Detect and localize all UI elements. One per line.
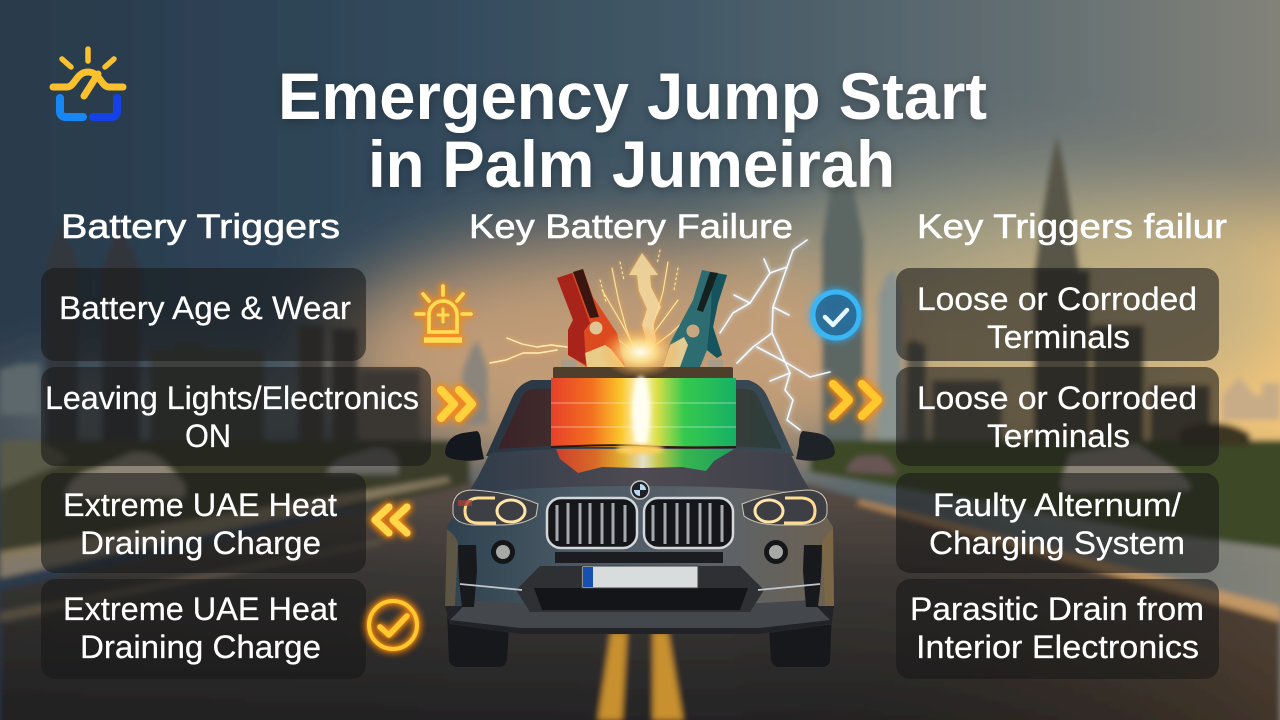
headlight right <box>742 490 827 525</box>
roof and windshield <box>486 380 794 456</box>
panel: Loose or Corroded Terminals 1 <box>896 268 1219 361</box>
battery <box>551 360 736 454</box>
grille left <box>547 498 637 548</box>
icon: double chevron right (right column) <box>833 384 878 416</box>
title: Emergency Jump Start <box>278 59 987 133</box>
panel: Faulty Alternum: Charging System <box>929 525 1185 561</box>
icon: double chevron right (left column) <box>441 390 472 418</box>
icon: double chevron left <box>375 507 407 533</box>
bumper intake <box>555 552 723 563</box>
mirror left <box>445 431 484 461</box>
lower bumper <box>516 566 764 612</box>
side vents <box>458 545 822 607</box>
logo icon: sun and battery <box>53 49 123 117</box>
panel: Extreme UAE Heat 2: Draining Charge <box>80 629 321 665</box>
panel: Faulty Alternum: Faulty Alternum/ <box>933 487 1181 523</box>
headlight left <box>453 490 538 525</box>
red clamp <box>557 269 625 367</box>
mirror right <box>796 431 835 461</box>
panel: Faulty Alternum <box>896 473 1219 573</box>
panel: Extreme UAE Heat 1: Draining Charge <box>80 525 321 561</box>
spark arrow <box>629 253 661 355</box>
panel: Loose or Corroded Terminals 1: Loose or Corroded <box>917 281 1197 317</box>
BMW badge <box>631 481 649 499</box>
hood reflection <box>556 449 734 473</box>
panel: Loose or Corroded Terminals 2 <box>896 367 1219 466</box>
license plate <box>582 566 698 588</box>
lightning right of car <box>720 240 830 430</box>
panel: Leaving Lights/Electronics ON <box>41 367 431 466</box>
heading: Key Battery Failure: Key Battery Failure <box>469 208 793 246</box>
teal clamp <box>663 270 727 367</box>
panel: Loose or Corroded Terminals 1: Terminals <box>987 319 1130 355</box>
panel: Extreme UAE Heat 2: Extreme UAE Heat <box>63 591 337 627</box>
panel: Leaving Lights/Electronics ON: ON <box>185 418 231 454</box>
car illustration <box>440 240 840 667</box>
panel: Extreme UAE Heat 1 <box>41 473 366 573</box>
icon: alarm beacon <box>416 286 471 340</box>
wheels <box>447 610 832 667</box>
panel: Battery Age & Wear <box>41 268 366 361</box>
fog lamp left <box>491 540 515 564</box>
panel: Battery Age & Wear: Battery Age & Wear <box>59 290 351 326</box>
icon: blue check badge <box>813 292 859 338</box>
title <box>278 59 987 201</box>
panel: Extreme UAE Heat 1: Extreme UAE Heat <box>63 487 337 523</box>
panel: Loose or Corroded Terminals 2: Loose or Corroded <box>917 380 1197 416</box>
panel: Parasitic Drain <box>896 579 1219 679</box>
heading: Battery Triggers: Battery Triggers <box>61 208 340 246</box>
panel: Loose or Corroded Terminals 2: Terminals <box>987 418 1130 454</box>
central flare <box>600 326 680 378</box>
heading: Key Triggers failur: Key Triggers failur <box>917 208 1227 246</box>
panel: Parasitic Drain: Parasitic Drain from <box>910 591 1204 627</box>
panel: Extreme UAE Heat 2 <box>41 579 366 679</box>
fog lamp right <box>764 540 788 564</box>
sparks and lightning left <box>490 250 696 363</box>
panel: Parasitic Drain: Interior Electronics <box>916 629 1199 665</box>
grille right <box>644 498 733 548</box>
title: in Palm Jumeirah <box>368 127 895 201</box>
icon: orange check circle <box>369 601 417 649</box>
car body <box>440 440 840 640</box>
panel: Leaving Lights/Electronics ON: Leaving Lights/Electronics <box>45 380 419 416</box>
